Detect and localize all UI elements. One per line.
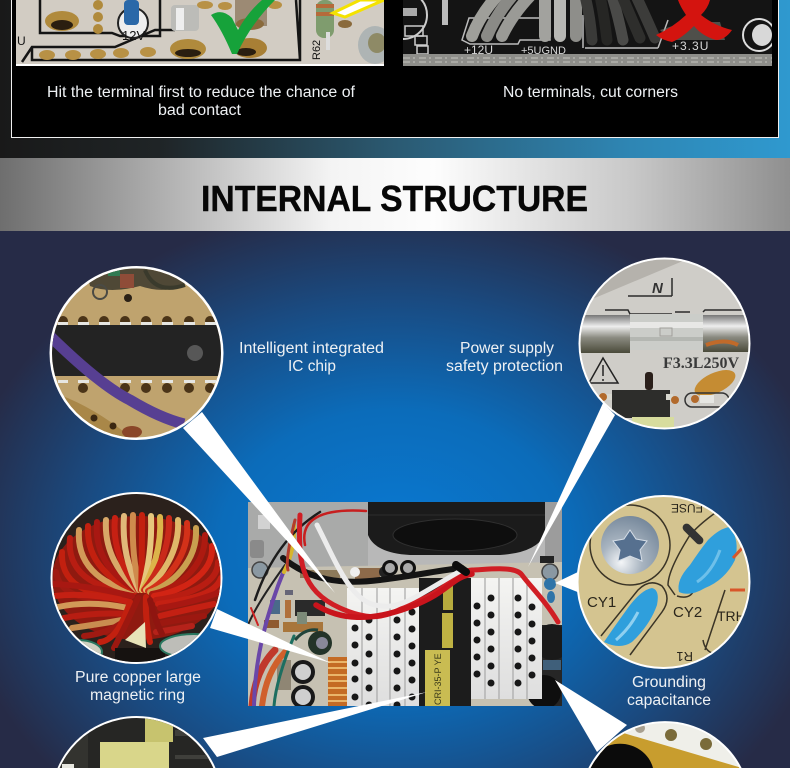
label: magnetic ring: Pure copper large: [75, 669, 201, 686]
label: magnetic ring: [75, 669, 201, 704]
caption: terminal: Hit the terminal first to reduce the chance of: [47, 84, 356, 101]
title: INTERNAL STRUCTURE: [201, 178, 588, 219]
arrow: magnetic ring pointer: [210, 609, 331, 663]
label: grounding capacitance: Grounding: [632, 674, 706, 691]
arrow: grounding pointer: [555, 571, 580, 593]
circle: fuse close-up: N: [652, 280, 664, 297]
label: fuse: Power supply: [460, 340, 554, 357]
arrow: fuse pointer: [528, 403, 615, 567]
label: IC chip: Intelligent integrated: [239, 340, 384, 357]
circle: fuse close-up: [578, 258, 751, 430]
circle: grounding capacitor close-up: CY2: [673, 604, 702, 621]
photo: power supply interior: CRI-35-P YE: [433, 653, 443, 705]
panel: terminal comparison: [12, 0, 778, 138]
photo: wires without terminals with red cross: +12U: [464, 43, 493, 57]
photo: wires without terminals with red cross: [379, 0, 775, 66]
circle: capacitor close-up: [50, 716, 224, 768]
label: magnetic ring: magnetic ring: [90, 687, 185, 704]
photo: soldered terminal board with check mark: U: [17, 34, 26, 48]
circle: fuse close-up: F3.3L250V: [663, 355, 740, 372]
photo: soldered terminal board with check mark: R62: [311, 40, 323, 60]
caption: terminal: [47, 84, 356, 119]
arrow: IC chip pointer: [183, 412, 335, 593]
label: grounding capacitance: capacitance: [627, 692, 711, 709]
photo: wires without terminals with red cross: +5UGND: [521, 45, 566, 57]
icon: green check mark: [211, 0, 275, 54]
circle: IC chip close-up: [49, 266, 225, 445]
circle: grounding capacitor close-up: FUSE: [671, 501, 703, 515]
circle: grounding capacitor close-up: TRH: [717, 608, 746, 624]
caption: terminal: bad contact: [158, 102, 242, 119]
circle: grounding capacitor close-up: [576, 495, 751, 669]
circle: grounding capacitor close-up: R1: [676, 649, 693, 664]
label: grounding capacitance: [627, 674, 711, 709]
internal structure background: [0, 231, 790, 768]
arrow: socket pointer: [555, 680, 627, 752]
label: fuse: safety protection: [446, 358, 563, 375]
icon: red cross: [656, 0, 732, 42]
circle: grounding capacitor close-up: CY1: [587, 594, 616, 611]
banner background: [0, 158, 790, 231]
top section background: [0, 0, 790, 158]
label: IC chip: IC chip: [288, 358, 336, 375]
photo: power supply interior: [248, 502, 570, 709]
photo: wires without terminals with red cross: +3.3U: [672, 39, 709, 53]
arrow: capacitor pointer: [203, 692, 427, 757]
circle: socket close-up: [585, 721, 745, 768]
label: fuse: [446, 340, 563, 375]
caption: no terminals: No terminals, cut corners: [503, 84, 678, 101]
label: IC chip: [239, 340, 384, 375]
photo: soldered terminal board with check mark: [16, 0, 392, 66]
circle: copper magnetic ring close-up: [50, 492, 228, 668]
photo: soldered terminal board with check mark: 12V: [122, 28, 145, 43]
